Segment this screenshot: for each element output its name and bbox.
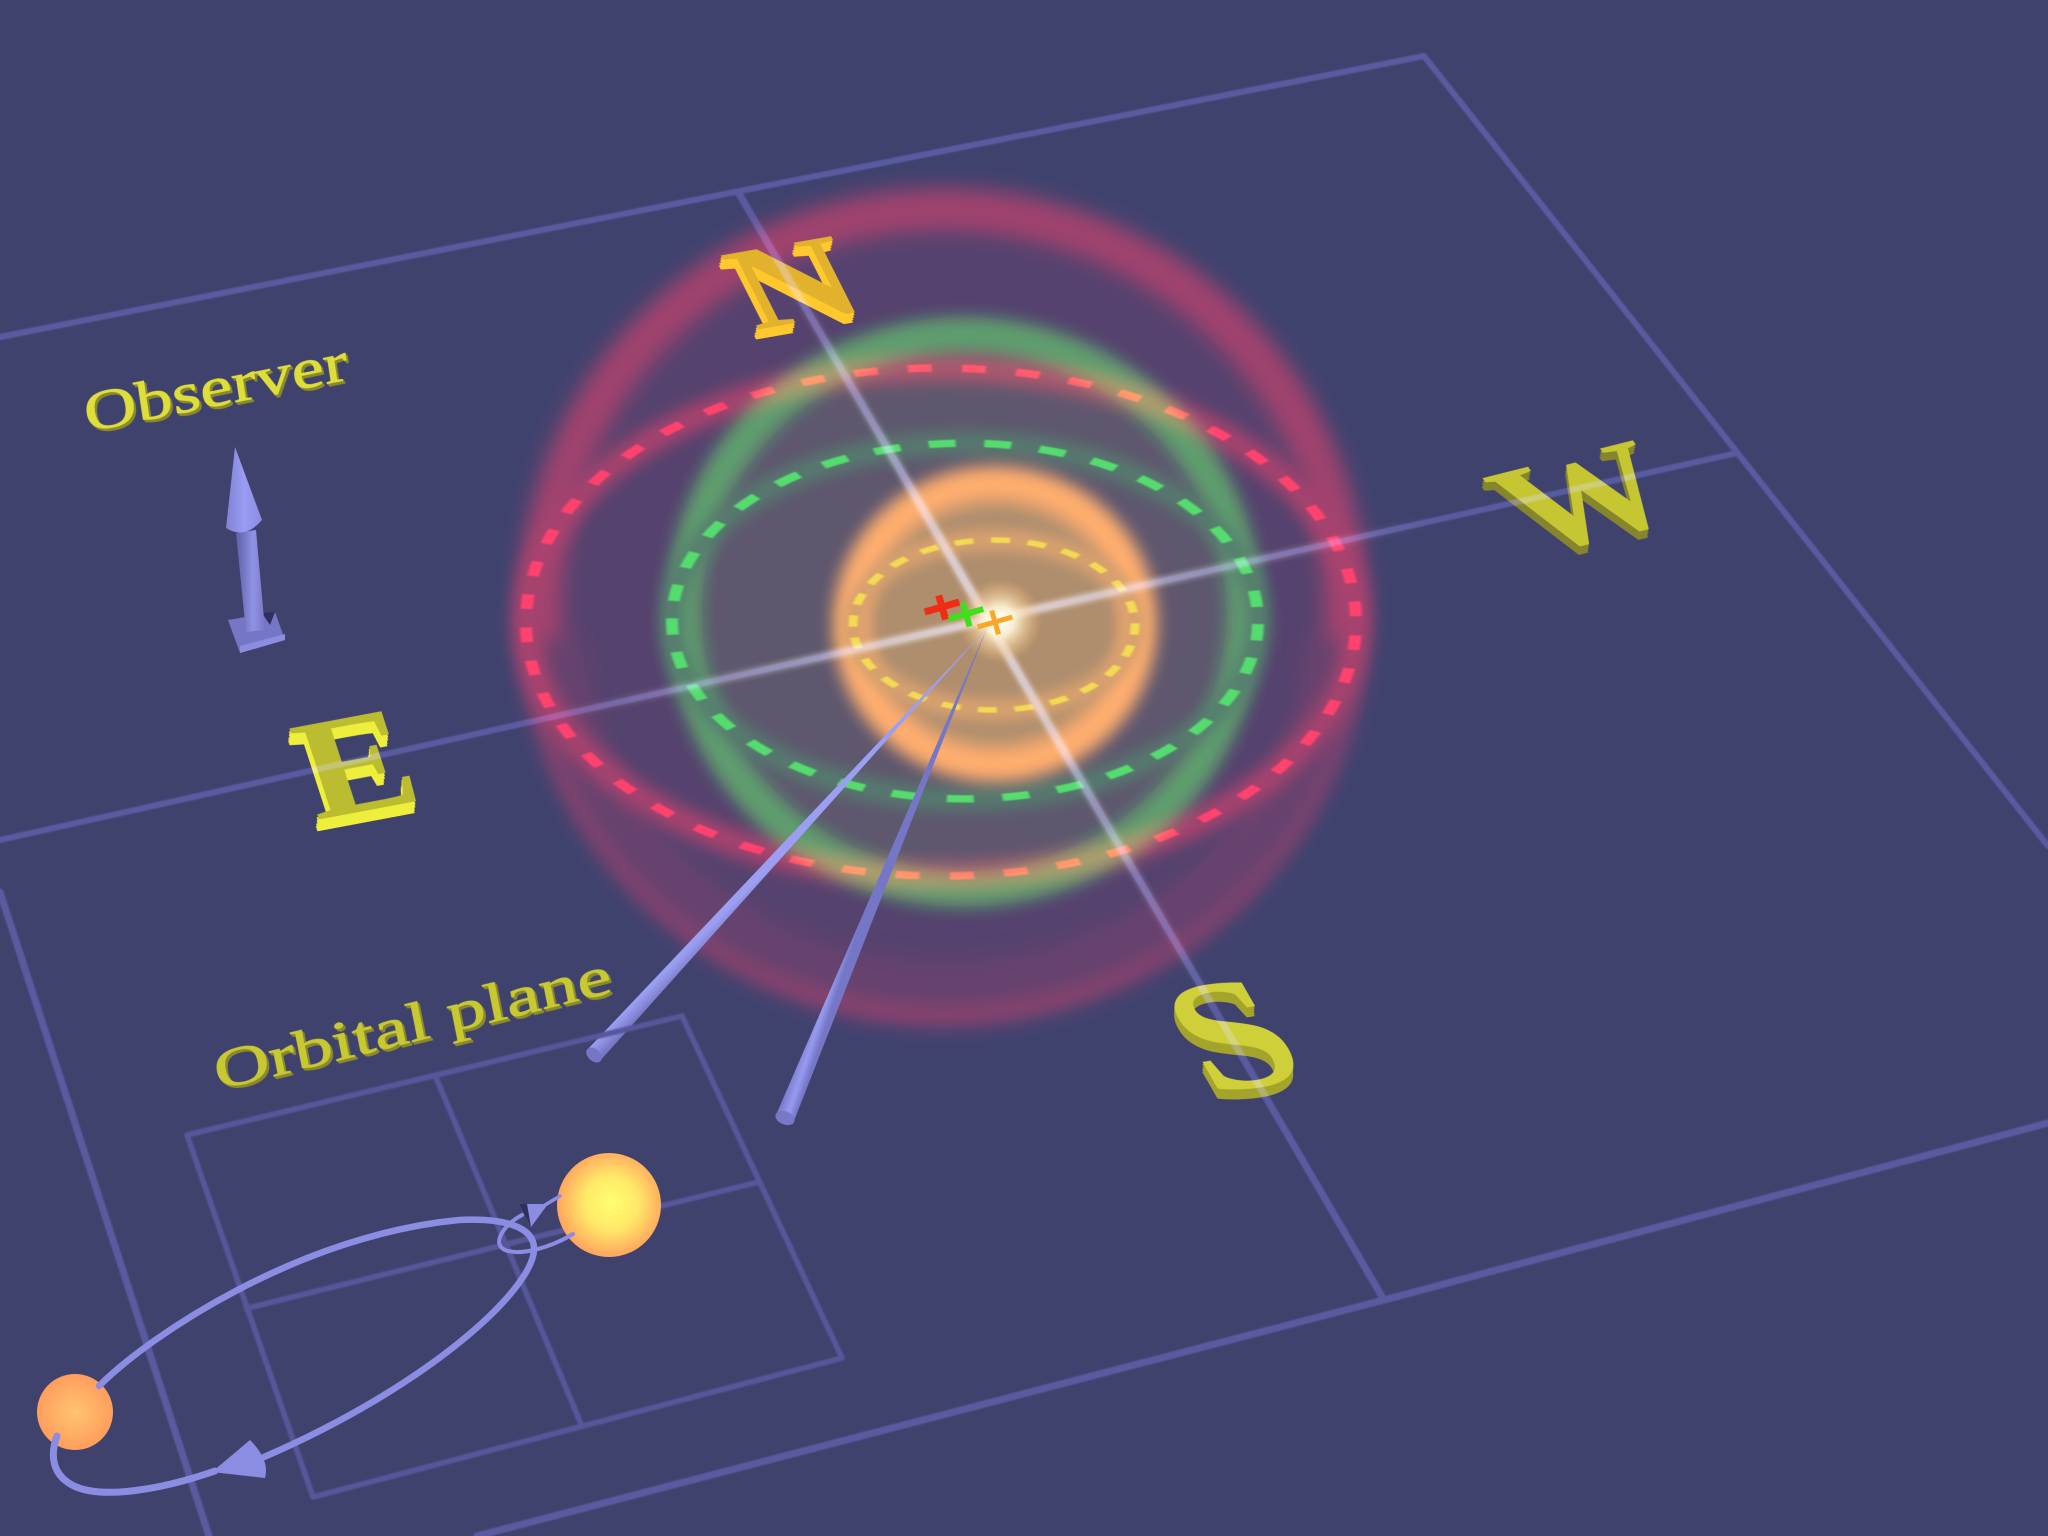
centroid crosses	[921, 591, 1016, 639]
letter W: W	[1461, 412, 1707, 582]
letter N: N	[705, 210, 883, 355]
arrow head	[226, 447, 262, 532]
letter S: S	[1133, 943, 1333, 1127]
red cross	[921, 591, 963, 624]
orbital plane label: Orbital plane	[208, 944, 616, 1102]
letter E: E	[276, 677, 436, 851]
binary orbit tube	[53, 1196, 573, 1492]
green dashed orbit ellipse	[672, 443, 1258, 799]
arrow base	[228, 612, 285, 653]
lower tail path	[53, 1436, 215, 1492]
upper orbit arrowhead	[519, 1204, 548, 1227]
main orbit path	[99, 1220, 534, 1457]
yellow dashed orbit ellipse	[853, 540, 1135, 710]
inner orbit loop	[499, 1215, 573, 1252]
orange cross	[974, 606, 1016, 639]
lower orbit arrowhead	[212, 1440, 266, 1478]
observer label: Observer	[80, 330, 352, 445]
small star	[37, 1374, 113, 1450]
central glow	[958, 579, 1042, 663]
red emission ring	[526, 210, 1356, 1002]
green emission ring	[672, 335, 1258, 889]
orange emission ring	[851, 484, 1139, 764]
sight line cone 1	[583, 628, 987, 1066]
large star	[557, 1153, 661, 1257]
arrow shaft	[236, 530, 265, 632]
sight line cone 2	[773, 628, 987, 1128]
orbital plane grid	[187, 1016, 842, 1497]
observer arrow	[226, 447, 285, 653]
green cross	[945, 598, 987, 631]
sky-plane grid glow	[0, 192, 1737, 1300]
red dashed orbit ellipse	[526, 368, 1356, 876]
